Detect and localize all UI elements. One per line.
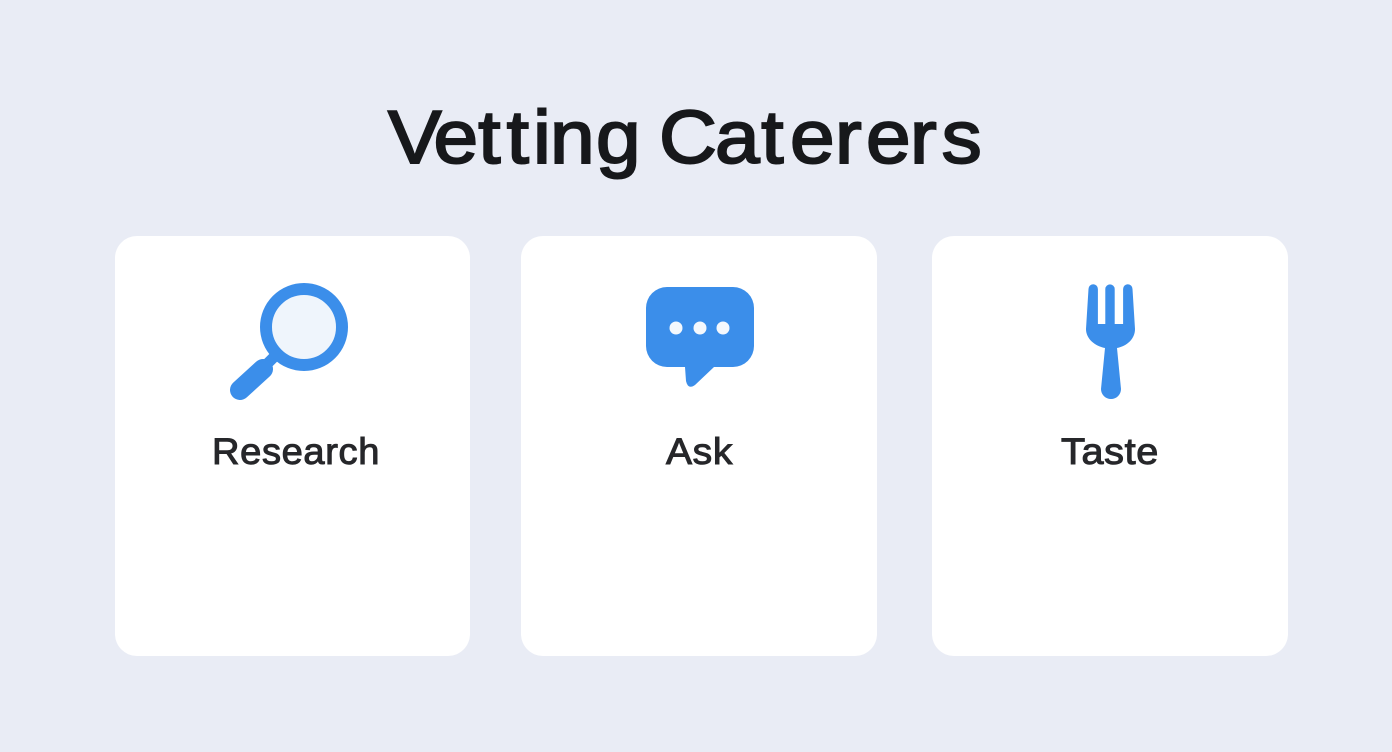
title: Vetting Caterers — [388, 96, 982, 179]
icon: magnifying glass — [240, 289, 342, 390]
label: taste: Taste — [1061, 431, 1159, 472]
panel: ask — [521, 236, 877, 656]
panel: taste — [932, 236, 1288, 656]
label: ask: Ask — [666, 431, 733, 472]
panel: research — [115, 236, 470, 656]
icon: speech bubble — [646, 287, 754, 387]
icon: fork — [1086, 284, 1135, 399]
label: research: Research — [212, 431, 380, 472]
